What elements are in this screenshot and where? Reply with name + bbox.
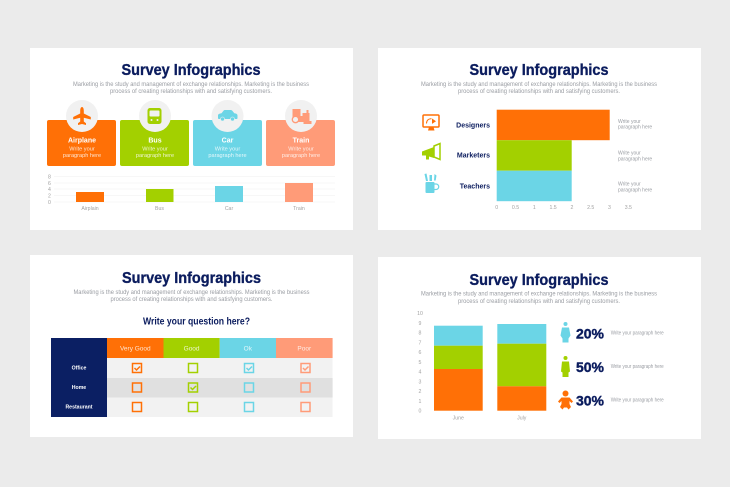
text: paragraph notes: Write your (618, 182, 641, 188)
bar chart: audiences: 1 (533, 205, 536, 211)
bar chart: audiences: 2 (570, 205, 573, 211)
card: train: paragraph here (282, 153, 320, 159)
bar chart: audiences: 0.5 (512, 205, 519, 211)
card: airplane: Airplane (68, 138, 96, 144)
bar chart: audiences: 2.5 (587, 205, 594, 211)
table: Office (72, 366, 86, 372)
stacked bars: 2 (419, 389, 422, 395)
bar chart: transport: Airplain (81, 206, 99, 212)
card: car: Car (222, 138, 234, 144)
card: train: Write your (288, 146, 314, 152)
subtitle (421, 290, 657, 305)
stacked bars: 1 (419, 399, 422, 405)
subtitle: process of creating relationships with and satisfying customers. (458, 88, 620, 95)
card: bus (120, 100, 189, 166)
bar chart: transport: 8 (48, 174, 51, 180)
stacked bars: July (517, 416, 527, 422)
title: Survey Infographics (122, 270, 261, 287)
stacked bars: 8 (419, 330, 422, 336)
subtitle: Marketing is the study and management of exchange relationships. Marketing is the business (73, 81, 309, 88)
icon: person blue (560, 322, 570, 342)
icon: monitor (423, 115, 439, 130)
question heading: Write your question here? (143, 316, 250, 328)
bar chart: transport: Bus (155, 206, 164, 212)
title: Survey Infographics (470, 62, 608, 79)
stacked bars: 5 (419, 360, 422, 366)
note: 20%: Write your paragraph here (611, 330, 664, 336)
text: paragraph notes: paragraph here (618, 125, 652, 131)
bar chart: audiences (456, 110, 632, 211)
card: airplane: paragraph here (63, 153, 101, 159)
stacked bars (417, 311, 546, 422)
subtitle: Marketing is the study and management of exchange relationships. Marketing is the business (421, 290, 657, 298)
icon: megaphone (422, 144, 440, 160)
title: Survey Infographics (122, 62, 260, 79)
stacked bars: June (453, 416, 464, 422)
card: car: Write your (215, 146, 240, 152)
bar chart: transport: 0 (48, 200, 51, 206)
stacked bars: 7 (419, 340, 422, 346)
subtitle (421, 81, 657, 95)
stacked bars: 0 (419, 408, 422, 414)
subtitle: process of creating relationships with and satisfying customers. (110, 88, 272, 95)
subtitle: process of creating relationships with and satisfying customers. (110, 296, 273, 303)
bar chart: audiences: Designers (456, 122, 490, 130)
card: train (266, 100, 335, 166)
bar chart: audiences: Marketers (457, 153, 490, 160)
panel: audience bar chart (378, 48, 701, 230)
bar chart: audiences: Teachers (460, 183, 490, 190)
bar chart: audiences: 3 (608, 205, 611, 211)
bar chart: audiences: 0 (495, 205, 498, 211)
bar chart: audiences: 3.5 (625, 205, 632, 211)
checkboxes (132, 364, 310, 412)
text: paragraph notes: Write your (618, 151, 641, 157)
card: airplane: Write your (69, 146, 95, 152)
card: bus: paragraph here (136, 153, 174, 159)
title: Survey Infographics (470, 272, 608, 289)
stat: 50%: 50% (576, 359, 605, 375)
stacked bars: 6 (419, 350, 422, 356)
stat: 30%: 30% (576, 392, 605, 408)
subtitle (74, 289, 310, 303)
stacked bars: 10 (417, 311, 423, 317)
bar chart: transport: 6 (48, 181, 51, 187)
card: car: paragraph here (208, 153, 247, 159)
bar chart: transport: 2 (48, 194, 51, 200)
table: Home (72, 385, 86, 391)
text: paragraph notes: paragraph here (618, 156, 652, 162)
panel: question table (30, 255, 353, 437)
panel: transport survey (30, 48, 353, 230)
bar chart: transport: Train (293, 206, 305, 212)
icon: pencil cup (424, 174, 439, 193)
subtitle (73, 81, 309, 95)
table: Restaurant (65, 404, 93, 410)
card: bus: Bus (148, 138, 162, 144)
bar chart: audiences: 1.5 (549, 205, 557, 211)
table: Very Good (120, 346, 151, 352)
card: airplane (47, 100, 116, 166)
subtitle: Marketing is the study and management of exchange relationships. Marketing is the business (421, 81, 657, 88)
stat: 20%: 20% (576, 326, 605, 342)
card: train: Train (293, 138, 309, 144)
card: car (193, 100, 262, 166)
stacked bars: 4 (419, 370, 422, 376)
icon: person green (561, 356, 570, 377)
bar chart: transport (48, 174, 335, 212)
text: paragraph notes: Write your (618, 119, 641, 125)
text: paragraph notes (618, 119, 652, 193)
table (51, 338, 333, 417)
table: Ok (244, 346, 253, 352)
subtitle: Marketing is the study and management of exchange relationships. Marketing is the business (74, 289, 310, 296)
stacked bars: 9 (419, 321, 422, 327)
stacked bars: 3 (419, 379, 422, 385)
note: 50%: Write your paragraph here (611, 364, 664, 370)
bar chart: transport: Car (225, 206, 233, 212)
table: Poor (297, 346, 312, 352)
note: 30%: Write your paragraph here (611, 398, 664, 404)
table: Good (184, 346, 200, 352)
card: bus: Write your (142, 146, 168, 152)
bar chart: transport: 4 (48, 187, 51, 193)
icon: baby orange (558, 390, 573, 410)
panel: stacked bar chart (378, 257, 701, 439)
text: paragraph notes: paragraph here (618, 187, 652, 193)
subtitle: process of creating relationships with and satisfying customers. (458, 298, 620, 305)
